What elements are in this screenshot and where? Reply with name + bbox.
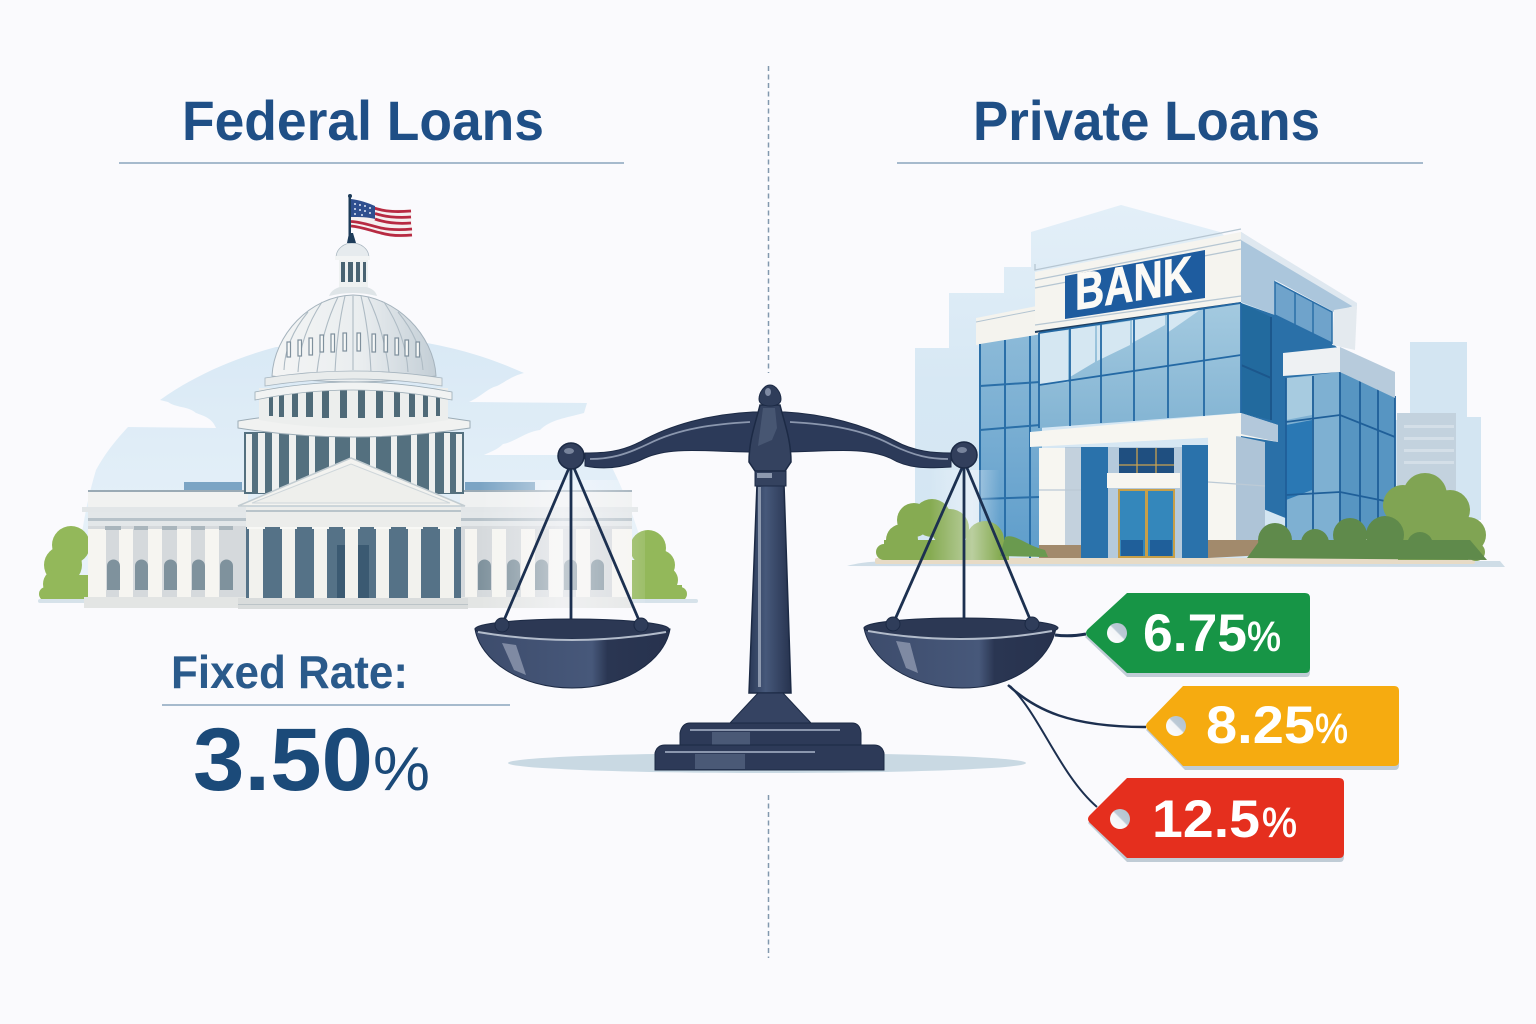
bushes <box>876 473 1487 561</box>
right wing <box>460 490 638 598</box>
right block <box>1283 347 1395 545</box>
right pan <box>864 617 1058 688</box>
base steps <box>84 597 632 609</box>
scale-side wash <box>480 480 645 610</box>
right side wall <box>1241 232 1357 540</box>
sky backdrop <box>76 343 655 600</box>
ground shadow <box>38 599 698 603</box>
illustration: capitol building <box>38 194 698 610</box>
stepped base <box>655 693 884 770</box>
price tag: 12.5%: % <box>1262 799 1297 846</box>
price tag: 12.5%: 12.5 <box>1152 790 1260 849</box>
price tag: 8.25%: % <box>1315 705 1348 752</box>
canopy <box>1030 413 1278 447</box>
entrance pillars <box>1039 436 1265 558</box>
price tag: 8.25% <box>1146 686 1399 770</box>
price tag: 6.75%: 6.75 <box>1143 604 1247 663</box>
cream parapet <box>1035 229 1241 332</box>
skyline backdrop <box>915 205 1481 560</box>
main glass facade <box>1039 303 1241 428</box>
heading: federal loans: Federal Loans <box>182 89 544 152</box>
colonnade drum <box>238 412 470 494</box>
scale shadow <box>508 753 1026 773</box>
cupola <box>329 233 377 296</box>
text block: fixed rate: Fixed Rate: <box>171 646 408 698</box>
left strings <box>502 468 641 625</box>
text block: fixed rate <box>162 646 510 809</box>
illustration: bank building <box>847 205 1505 567</box>
flag <box>348 194 412 238</box>
upper drum with windows <box>255 382 452 428</box>
balance scale <box>475 385 1058 773</box>
text block: fixed rate: % <box>373 735 430 804</box>
left pan <box>475 618 670 688</box>
center post cap <box>749 385 791 471</box>
price tag: 8.25%: 8.25 <box>1206 696 1315 755</box>
left wing <box>82 490 248 598</box>
price tag: 12.5% <box>1088 778 1344 862</box>
right strings <box>893 468 1032 624</box>
text block: fixed rate: 3.50 <box>193 709 373 809</box>
tag connectors <box>1008 634 1146 807</box>
left tower <box>976 305 1042 558</box>
price tag: 6.75% <box>1085 593 1310 677</box>
center divider <box>768 66 770 958</box>
entrance <box>1065 445 1208 558</box>
price tag: 6.75%: % <box>1247 613 1281 660</box>
ground <box>847 558 1505 567</box>
bank sign: BANK <box>1075 246 1192 322</box>
roof blocks <box>184 482 535 491</box>
main dome <box>265 295 442 386</box>
bushes <box>39 526 687 601</box>
beam <box>558 412 977 469</box>
scale-side wash <box>930 470 1000 560</box>
column <box>749 471 791 693</box>
central portico <box>238 458 465 598</box>
heading: private loans: Private Loans <box>973 89 1320 152</box>
